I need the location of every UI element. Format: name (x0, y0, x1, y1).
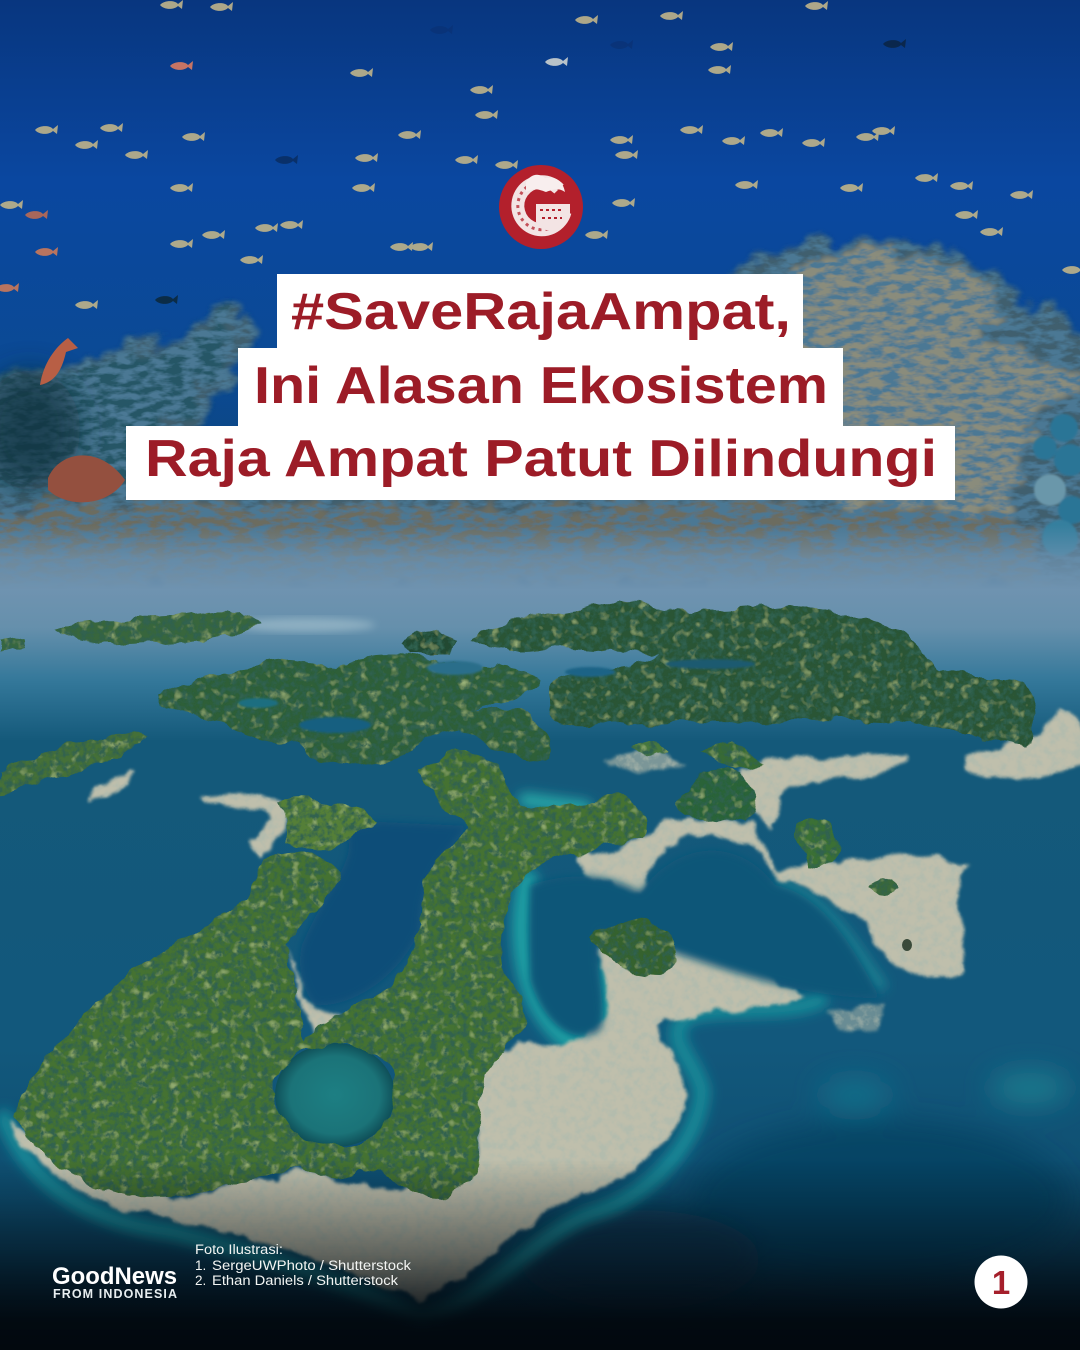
aerial photo: sea and islands (0, 589, 1080, 1350)
coral shadow left (0, 370, 80, 490)
photo credits: Foto Ilustrasi: (195, 1242, 283, 1257)
title line 3: Raja Ampat Patut Dilindungi (145, 430, 937, 488)
deep water patches (520, 1072, 1070, 1310)
turquoise reef rim (4, 800, 880, 1318)
pale distant water (235, 618, 375, 632)
page number badge: 1 (992, 1264, 1010, 1301)
large red fish (48, 455, 125, 502)
sand flats and reefs (10, 710, 1080, 1300)
photo credits: SergeUWPhoto / Shutterstock (212, 1258, 411, 1273)
photo credits (195, 1242, 411, 1288)
logo: Garuda emblem (499, 165, 583, 249)
coral reef (0, 238, 1080, 590)
title: white label strips (126, 274, 955, 500)
sea (0, 589, 1080, 1350)
photo credits: Ethan Daniels / Shutterstock (212, 1273, 398, 1288)
brand: GoodNews from Indonesia: GoodNews (52, 1263, 177, 1290)
lagoon (275, 1043, 395, 1147)
background: underwater photo (0, 0, 1080, 600)
brand: GoodNews from Indonesia: FROM INDONESIA (53, 1287, 177, 1301)
photo credits: 2. (195, 1273, 206, 1288)
island: large southern (17, 751, 648, 1197)
fish school (0, 0, 1080, 309)
title line 1: #SaveRajaAmpat, (291, 283, 791, 341)
islet: far north-west small (0, 637, 24, 652)
island: central range (155, 655, 553, 764)
islets: east (675, 768, 756, 822)
inner bays of northern ranges (238, 659, 755, 733)
photo credits: 1. (195, 1258, 206, 1273)
islet: north-west (55, 611, 262, 644)
islands (0, 600, 1036, 1197)
fog transition (0, 525, 1080, 590)
page number badge (974, 1256, 1028, 1308)
title line 2: Ini Alasan Ekosistem (254, 357, 828, 415)
islet: north cap (402, 630, 455, 655)
islet: central south (590, 922, 679, 975)
peninsula top of south (278, 799, 380, 847)
islet rocks (902, 939, 912, 951)
bottom dark gradient (0, 1160, 1080, 1350)
dark inner basins (300, 822, 880, 1036)
island: northern range (470, 600, 1036, 745)
islet: west (0, 735, 148, 795)
blue rounded corals (1033, 414, 1080, 556)
